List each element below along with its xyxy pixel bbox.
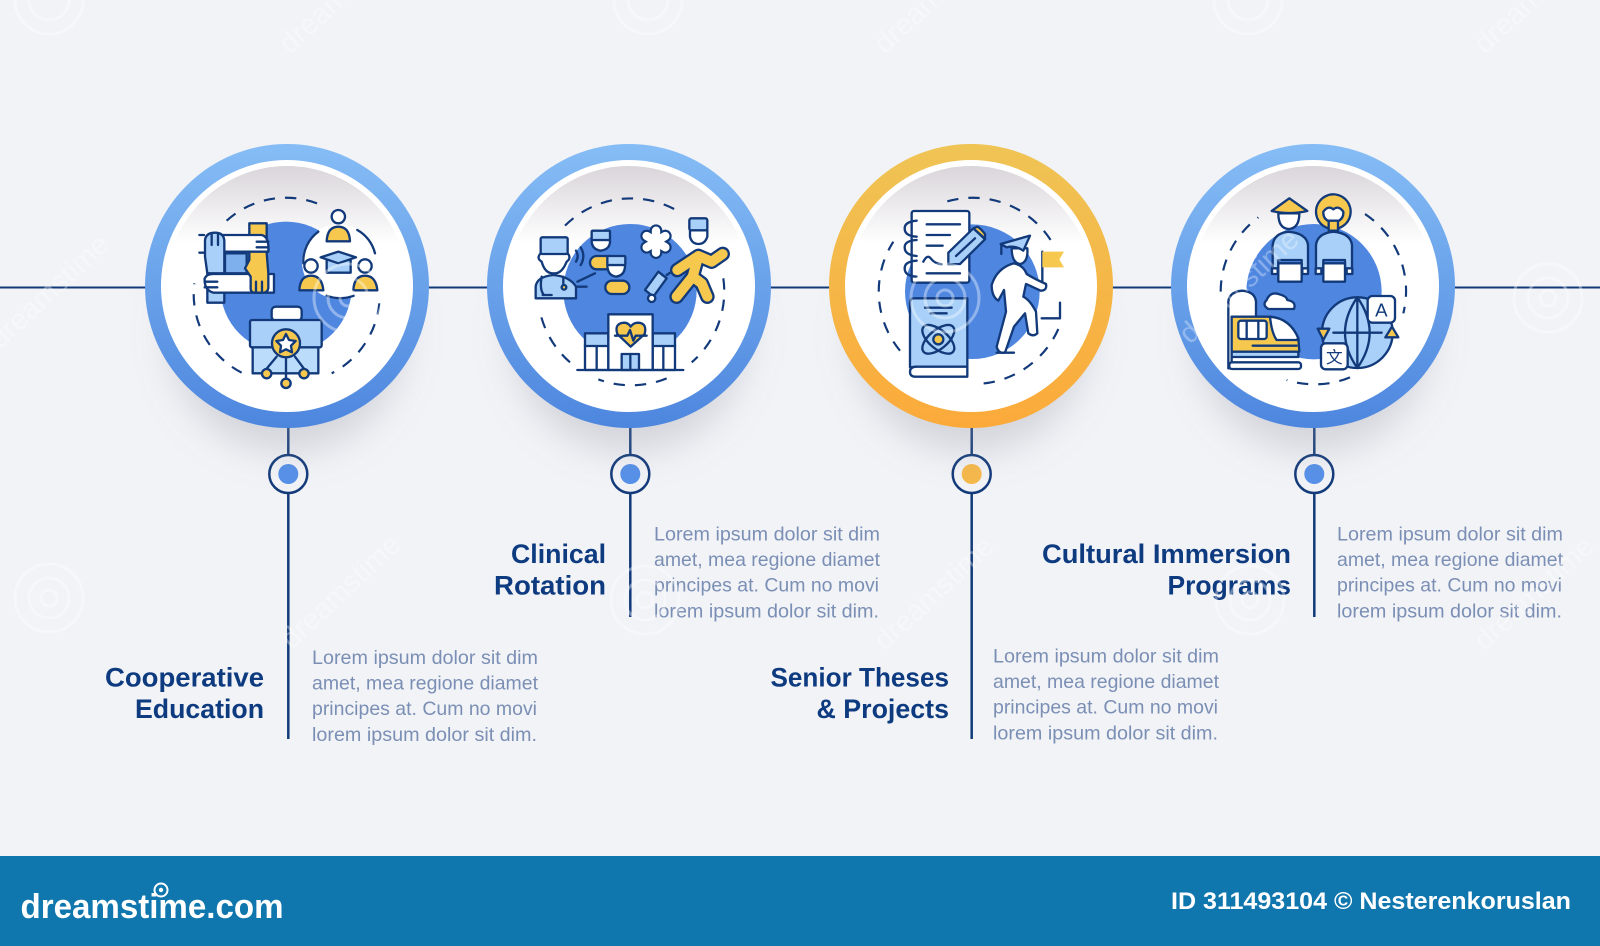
watermarks: dreamstime <box>275 528 408 655</box>
text block 3: lorem ipsum dolor sit dim. <box>993 722 1218 744</box>
text block 1: amet, mea regione diamet <box>312 672 539 694</box>
translation letters: A <box>1375 300 1388 321</box>
colleagues <box>590 231 629 294</box>
heading: clinical rotation: Clinical <box>511 539 606 569</box>
footer logo: dreamstime.com <box>20 888 284 926</box>
text block 2: amet, mea regione diamet <box>654 549 881 571</box>
heading: clinical rotation: Rotation <box>494 570 606 600</box>
text block 3: amet, mea regione diamet <box>993 671 1220 693</box>
person with conical hat <box>1272 198 1308 282</box>
text block 1: lorem ipsum dolor sit dim. <box>312 724 537 746</box>
text block 4: Lorem ipsum dolor sit dim <box>1337 524 1563 546</box>
cloud <box>1265 293 1295 309</box>
person with curly hair <box>1316 194 1352 282</box>
step 4: cultural immersion programs <box>1042 144 1564 622</box>
icon: notebook, atom book and graduate <box>879 198 1064 384</box>
translation letters <box>1326 300 1388 367</box>
doctor <box>536 237 595 298</box>
stem and node 4 <box>1295 425 1333 617</box>
circle 1 <box>145 144 429 452</box>
pencil <box>948 227 985 264</box>
heading: cooperative education: Education <box>135 694 264 724</box>
timeline line <box>0 286 1600 288</box>
text block 3: principes at. Cum no movi <box>993 696 1218 718</box>
circle 2 <box>487 144 771 452</box>
train <box>1228 291 1301 369</box>
text block 4: amet, mea regione diamet <box>1337 549 1564 571</box>
text block 2: principes at. Cum no movi <box>654 574 879 596</box>
watermarks: dreamstime <box>1173 223 1306 350</box>
atom book <box>910 298 967 377</box>
heading: cultural immersion programs: Cultural Immersion <box>1042 539 1291 569</box>
text block 4: lorem ipsum dolor sit dim. <box>1337 600 1562 622</box>
suitcase <box>645 272 672 302</box>
circle 4 <box>1171 144 1455 452</box>
medical star <box>647 231 665 253</box>
flag and steps <box>1042 252 1064 318</box>
student <box>992 236 1046 353</box>
heading: senior theses and projects: & Projects <box>816 694 949 724</box>
stem and node 1 <box>269 425 307 739</box>
icon: people, train and globe translation <box>1221 194 1406 384</box>
watermarks: dreamstime <box>1468 530 1600 657</box>
stem and node 3 <box>953 425 991 739</box>
text block 2: lorem ipsum dolor sit dim. <box>654 600 879 622</box>
briefcase <box>250 307 322 388</box>
heading: cooperative education: Cooperative <box>105 662 264 692</box>
footer bar <box>0 856 1600 946</box>
footer credit: ID 311493104 © Nesterenkoruslan <box>1171 888 1571 915</box>
text block 1: principes at. Cum no movi <box>312 698 537 720</box>
hands <box>199 223 274 303</box>
graduates <box>299 210 377 290</box>
text block 3: Lorem ipsum dolor sit dim <box>993 646 1219 668</box>
step 1: cooperative education <box>105 144 539 746</box>
icon: teamwork, graduates and briefcase <box>194 198 379 388</box>
stem and node 2 <box>611 425 649 617</box>
running man <box>677 218 723 297</box>
translation letters: 文 <box>1326 348 1343 367</box>
hospital <box>577 314 683 370</box>
icon: doctors, runner and hospital <box>536 198 724 385</box>
step 3: senior theses and projects <box>770 144 1220 744</box>
heading: senior theses and projects: Senior Theses <box>770 662 949 692</box>
step 2: clinical rotation <box>487 144 881 622</box>
globe with translation <box>1318 296 1398 369</box>
notebook <box>905 211 969 283</box>
text block 1: Lorem ipsum dolor sit dim <box>312 647 538 669</box>
circle 3 <box>829 144 1113 452</box>
text block 2: Lorem ipsum dolor sit dim <box>654 524 880 546</box>
heading: cultural immersion programs: Programs <box>1168 570 1291 600</box>
watermarks <box>0 0 1600 657</box>
watermarks: dreamstime <box>868 530 1001 657</box>
text block 4: principes at. Cum no movi <box>1337 574 1562 596</box>
